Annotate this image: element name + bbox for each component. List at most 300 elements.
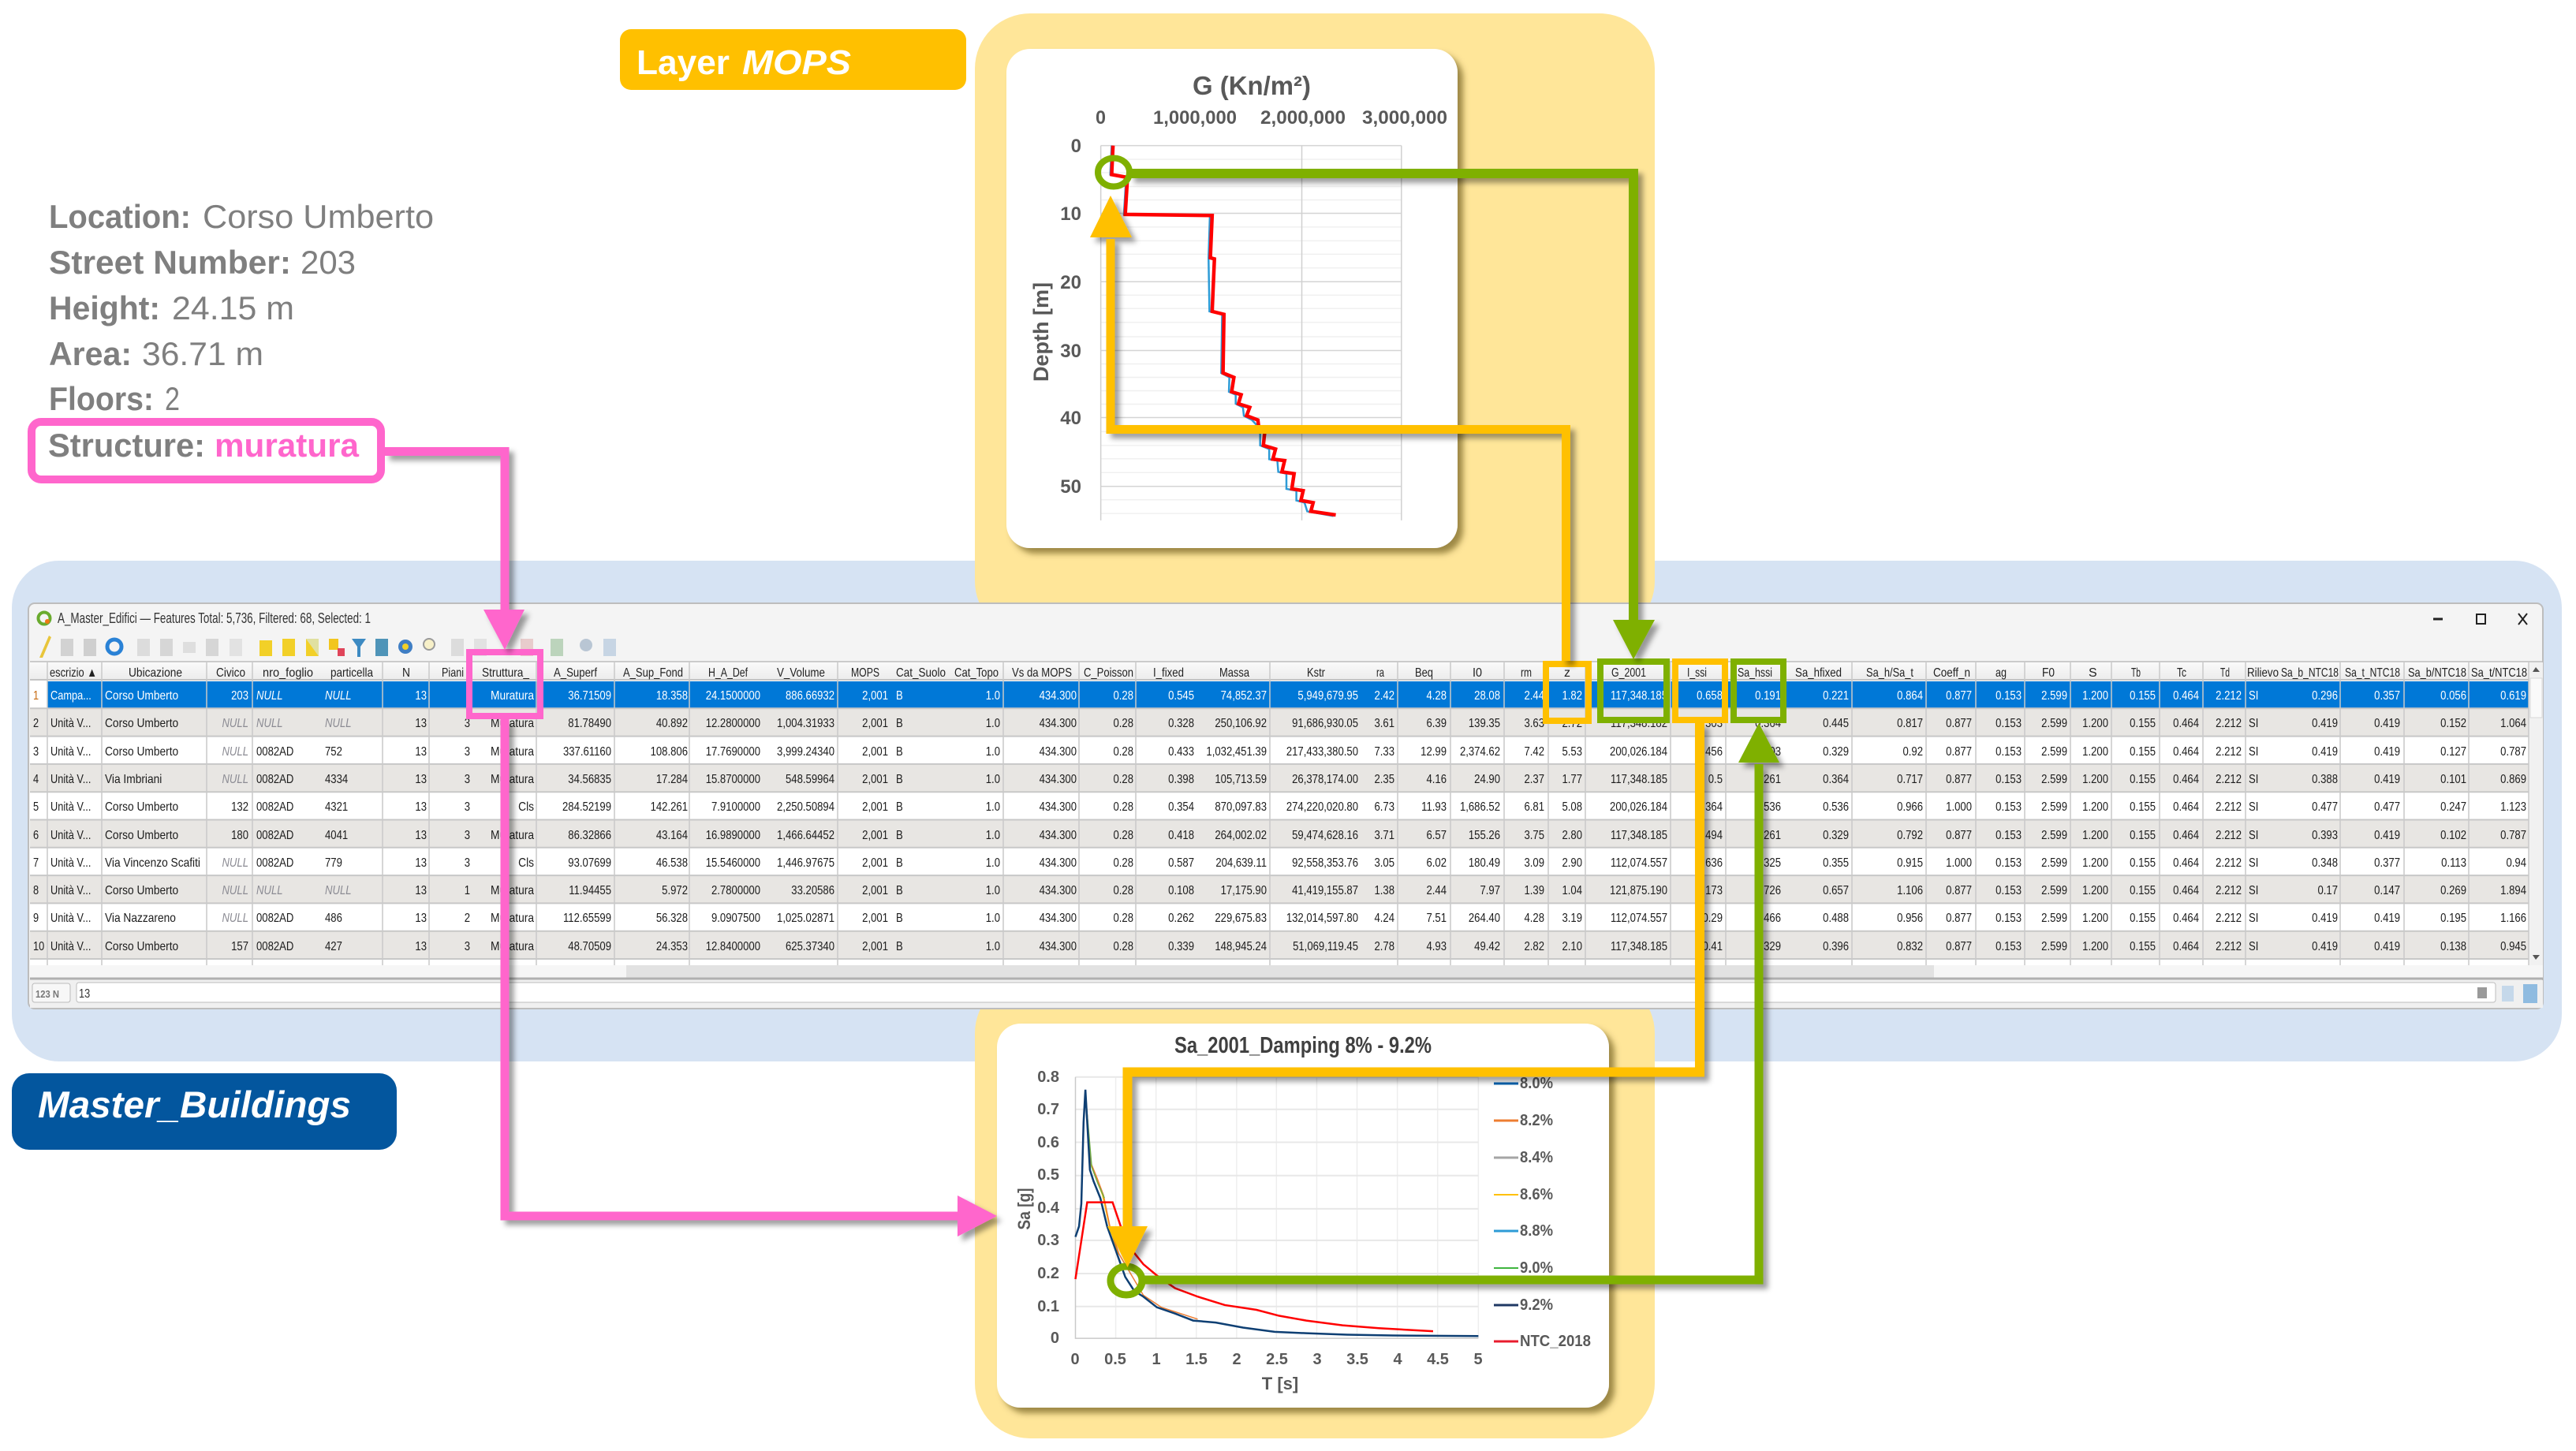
column: H_A_Def: 16.9890000	[706, 829, 760, 842]
column: z: 1.77	[1562, 773, 1582, 786]
column: descrizione: Unità V...	[50, 717, 91, 730]
column: G_2001: 117,348.185	[1611, 829, 1667, 842]
column: row numbers: 9	[33, 912, 39, 925]
table header: Piani	[442, 666, 464, 680]
column: rm: 1.39	[1524, 884, 1544, 897]
column: Sa_hssi: 0.191	[1755, 689, 1781, 703]
panel: Layer MOPS top background	[975, 13, 1655, 636]
column: S: 1.200	[2082, 745, 2108, 759]
column: I0: 28.08	[1474, 689, 1500, 703]
column: Civico: NULL	[222, 856, 248, 870]
column: Tb: 0.155	[2130, 856, 2156, 870]
table header: ag	[1995, 666, 2007, 680]
table header: G_2001	[1611, 666, 1646, 680]
y axis labels: 50	[1060, 476, 1081, 498]
table header: Sa_t_NTC18	[2345, 666, 2400, 680]
column: Ubicazione: Corso Umberto	[105, 744, 178, 759]
column: Struttura: Muratura	[491, 772, 535, 786]
column: Sa_h/Sa_t: 0.956	[1897, 912, 1923, 925]
column: Sa_hfixed: 0.221	[1823, 689, 1849, 703]
column: I_fixed: 0.354	[1168, 800, 1194, 814]
column: A_Superf: 11.94455	[569, 884, 611, 897]
column: Sa_t/NTC18: 0.619	[2500, 689, 2526, 703]
column: G_2001: 117,348.185	[1611, 689, 1667, 703]
table header: H_A_Def	[708, 666, 748, 680]
horizontal scrollbar	[30, 965, 2543, 979]
column: particella: NULL	[325, 884, 352, 897]
column: C_Poisson: 0.28	[1113, 829, 1133, 842]
icon: QGIS logo	[38, 612, 50, 625]
column: Vs da MOPS: 434.300	[1040, 773, 1077, 786]
column: Struttura: Muratura	[491, 744, 535, 759]
column: Sa_t/NTC18: 0.869	[2500, 773, 2526, 786]
column: MOPS: 2,001	[862, 856, 888, 870]
column: G_2001: 112,074.557	[1611, 912, 1667, 925]
column: Struttura: Cls	[518, 856, 534, 870]
column: Sa_b_NTC18: 0.419	[2312, 912, 2338, 925]
column: z: 2.72	[1562, 717, 1582, 730]
column: particella: 486	[325, 912, 342, 925]
column: Kstr: 91,686,930.05	[1292, 717, 1358, 730]
panel: QGIS attribute table window	[28, 603, 2543, 1009]
label: Master_Buildings: Master_Buildings	[38, 1084, 351, 1125]
column: Cat_Suolo: B	[896, 689, 903, 703]
column: Td: 2.212	[2216, 800, 2242, 814]
column: particella: 4321	[325, 800, 348, 814]
column: z: 1.82	[1562, 689, 1582, 703]
column: N: 13	[415, 884, 427, 897]
column: Kstr: 5,949,679.95	[1297, 689, 1358, 703]
x axis labels: 3.5	[1346, 1351, 1368, 1368]
column: H_A_Def	[706, 689, 760, 953]
x axis labels: 3	[1312, 1351, 1322, 1368]
column: I0: 139.35	[1469, 717, 1500, 730]
column: rm: 3.75	[1524, 829, 1544, 842]
column: descrizione: Unità V...	[50, 800, 91, 814]
column: H_A_Def: 12.2800000	[706, 717, 760, 730]
column: nro_foglio: NULL	[256, 689, 283, 703]
table header: Ubicazione	[129, 666, 182, 680]
column: G_2001: 121,875.190	[1610, 884, 1667, 897]
column: ag: 0.153	[1995, 745, 2022, 759]
legend: 8.6%	[1520, 1186, 1553, 1203]
column: A_Superf: 86.32866	[568, 829, 611, 842]
column: Vs da MOPS: 434.300	[1040, 829, 1077, 842]
column: Kstr: 217,433,380.50	[1286, 745, 1358, 759]
column: Sa_hssi: 0.466	[1755, 912, 1781, 925]
column: Sa_t/NTC18: 1.123	[2500, 800, 2526, 814]
column: I_fixed	[1168, 689, 1194, 953]
column: Sa_hfixed: 0.445	[1823, 717, 1849, 730]
column: S: 1.200	[2082, 856, 2108, 870]
table header: Cat_Topo	[954, 666, 999, 680]
column: G_2001: 200,026.184	[1610, 800, 1667, 814]
column: F0: 2.599	[2041, 717, 2067, 730]
column: Sa_h/Sa_t: 0.832	[1897, 940, 1923, 953]
column: A_Sup_Fond	[651, 689, 688, 953]
column: particella: 752	[325, 745, 342, 759]
column: A_Sup_Fond: 40.892	[656, 717, 688, 730]
column: Beq: 7.51	[1426, 912, 1447, 925]
legend: 8.8%	[1520, 1222, 1553, 1240]
text block: building attributes: Floors:	[49, 380, 154, 417]
column: Cat_Topo: 1.0	[986, 717, 1000, 730]
column: Massa: 229,675.83	[1215, 912, 1267, 925]
column: Sa_hfixed: 0.488	[1823, 912, 1849, 925]
column: A_Sup_Fond: 56.328	[656, 912, 688, 925]
column: A_Superf: 48.70509	[568, 940, 611, 953]
column: Td	[2216, 689, 2242, 953]
column: V_Volume: 33.20586	[791, 884, 834, 897]
column: Sa_hssi: 0.261	[1755, 829, 1781, 842]
column: row numbers: 1	[33, 689, 39, 703]
column: Kstr: 59,474,628.16	[1292, 829, 1358, 842]
column: A_Superf: 93.07699	[568, 856, 611, 870]
column: Sa_t_NTC18: 0.419	[2374, 940, 2400, 953]
table header: escrizio ▲	[50, 666, 97, 680]
column: Sa_hssi	[1755, 689, 1781, 953]
column: MOPS: 2,001	[862, 940, 888, 953]
column: S	[2082, 689, 2108, 953]
column: A_Sup_Fond: 43.164	[656, 829, 688, 842]
column: A_Sup_Fond: 108.806	[651, 745, 688, 759]
column: Sa_t_NTC18: 0.477	[2374, 800, 2400, 814]
column: Civico	[222, 689, 248, 953]
column: MOPS: 2,001	[862, 829, 888, 842]
column: particella: NULL	[325, 717, 352, 730]
marker: point on G profile	[1098, 158, 1129, 186]
column: H_A_Def: 7.9100000	[711, 800, 760, 814]
table header: Cat_Suolo	[896, 666, 946, 680]
y axis labels: 0.6	[1037, 1134, 1059, 1151]
column: Sa_t_NTC18: 0.419	[2374, 717, 2400, 730]
column: Tb: 0.155	[2130, 717, 2156, 730]
column: Sa_hssi: 0.261	[1755, 773, 1781, 786]
column: Tb: 0.155	[2130, 800, 2156, 814]
table header: MOPS	[851, 666, 879, 680]
window title: A_Master_Edifici — Features Total: 5,736, Filtered: 68, Selected: 1	[58, 610, 371, 627]
arrow: structure callout to Struttura column	[385, 451, 525, 650]
column: Sa_hfixed	[1823, 689, 1849, 953]
column: F0: 2.599	[2041, 800, 2067, 814]
column: ag: 0.153	[1995, 912, 2022, 925]
column: A_Sup_Fond: 142.261	[651, 800, 688, 814]
column: rm: 4.28	[1524, 912, 1544, 925]
column: Sa_t_NTC18: 0.419	[2374, 829, 2400, 842]
chart title: G (Kn/m²)	[1193, 71, 1311, 100]
column: Sa_b_NTC18: 0.348	[2312, 856, 2338, 870]
column: I_fixed: 0.418	[1168, 829, 1194, 842]
table header: Struttura_	[482, 666, 530, 680]
column: G_2001	[1610, 689, 1667, 953]
table header	[30, 662, 2543, 680]
column: I_fixed: 0.328	[1168, 717, 1194, 730]
column: Sa_t/NTC18: 1.064	[2500, 717, 2526, 730]
column: S: 1.200	[2082, 800, 2108, 814]
column: Sa_h/Sa_t: 1.106	[1897, 884, 1923, 897]
column: ra: 2.35	[1374, 773, 1394, 786]
column: I_ssi: 0.173	[1697, 884, 1723, 897]
column: N: 13	[415, 689, 427, 703]
arrow: spectrum point to Sa_hssi column	[1142, 723, 1779, 1280]
column: Cat_Topo: 1.0	[986, 745, 1000, 759]
column: N: 13	[415, 940, 427, 953]
column: Civico: NULL	[222, 773, 248, 786]
table header: Coeff_n	[1933, 666, 1970, 680]
text block: building attributes: 24.15 m	[172, 289, 294, 326]
chart card: Sa 2001 damping spectra	[997, 1024, 1609, 1408]
column: ra: 1.38	[1374, 884, 1394, 897]
column: Sa_h/Sa_t	[1897, 689, 1923, 953]
table header: Td	[2220, 666, 2230, 680]
column: Sa_b_NTC18: 0.393	[2312, 829, 2338, 842]
column: Vs da MOPS	[1040, 689, 1077, 953]
column: Cat_Suolo: B	[896, 829, 903, 842]
filter bar: 13	[79, 987, 90, 1001]
column: I_ssi: 0.29	[1702, 912, 1723, 925]
axis titles: T [s]	[1262, 1374, 1298, 1393]
column: Tc: 0.464	[2173, 800, 2199, 814]
column: N: 13	[415, 717, 427, 730]
column: rm: 6.81	[1524, 800, 1544, 814]
x axis labels: 1.5	[1185, 1351, 1208, 1368]
column: Cat_Suolo: B	[896, 912, 903, 925]
table header: A_Superf	[554, 666, 597, 680]
column: Cat_Topo	[986, 689, 1000, 953]
column: Cat_Suolo: B	[896, 773, 903, 786]
table header: Beq	[1415, 666, 1433, 680]
column: Coeff_n	[1946, 689, 1972, 953]
column: Tb	[2130, 689, 2156, 953]
column: Cat_Suolo: B	[896, 856, 903, 870]
y axis labels: 30	[1060, 341, 1081, 362]
column: Massa: 204,639.11	[1215, 856, 1267, 870]
text block: building attributes	[49, 198, 434, 417]
column: Piani: 1	[465, 884, 470, 897]
text block: building attributes: Location:	[49, 198, 191, 235]
column: nro_foglio: NULL	[256, 884, 283, 897]
column: Beq: 6.02	[1426, 856, 1447, 870]
column: Sa_b/NTC18: 0.113	[2441, 856, 2466, 870]
column: Sa_t_NTC18: 0.357	[2374, 689, 2400, 703]
table header: Rilievo	[2247, 666, 2279, 680]
column: Td: 2.212	[2216, 773, 2242, 786]
column: Coeff_n: 1.000	[1946, 800, 1972, 814]
column: I_fixed: 0.545	[1168, 689, 1194, 703]
y axis labels: 0.2	[1037, 1265, 1059, 1282]
label: Layer MOPS	[620, 29, 966, 90]
table header: Tb	[2131, 666, 2141, 680]
column: Tb: 0.155	[2130, 940, 2156, 953]
column: MOPS: 2,001	[862, 912, 888, 925]
column: nro_foglio: 0082AD	[256, 829, 293, 842]
column: ra: 3.71	[1374, 829, 1394, 842]
column: Sa_b/NTC18: 0.127	[2440, 745, 2466, 759]
table header: Sa_t/NTC18	[2471, 666, 2527, 680]
column: Rilievo: SI	[2249, 940, 2258, 953]
callout: Structure muratura: muratura	[215, 427, 360, 464]
column: nro_foglio: 0082AD	[256, 773, 293, 786]
column: Cat_Topo: 1.0	[986, 800, 1000, 814]
column: Sa_b_NTC18	[2312, 689, 2338, 953]
column: Coeff_n: 0.877	[1946, 773, 1972, 786]
column: F0: 2.599	[2041, 856, 2067, 870]
column: Rilievo: SI	[2249, 856, 2258, 870]
table header: F0	[2042, 666, 2055, 680]
column: ra: 2.42	[1374, 689, 1394, 703]
column: Cat_Suolo: B	[896, 800, 903, 814]
text block: building attributes: 203	[301, 244, 356, 281]
callout: Structure muratura	[32, 422, 381, 479]
column: I_ssi: 0.494	[1697, 829, 1723, 842]
column: ag: 0.153	[1995, 773, 2022, 786]
text block: building attributes: Street Number:	[49, 244, 291, 281]
column: Vs da MOPS: 434.300	[1040, 940, 1077, 953]
column: I0: 2,374.62	[1460, 745, 1500, 759]
column: Kstr: 92,558,353.76	[1292, 856, 1358, 870]
column: rm	[1524, 689, 1544, 953]
column: z	[1562, 689, 1582, 953]
column: row numbers: 4	[33, 773, 39, 786]
column: S: 1.200	[2082, 884, 2108, 897]
column: A_Superf: 112.65599	[563, 912, 611, 925]
column: z: 2.90	[1562, 856, 1582, 870]
column: Piani: 3	[465, 940, 470, 953]
column: Td: 2.212	[2216, 689, 2242, 703]
x axis labels: 1,000,000	[1153, 107, 1237, 129]
column: Struttura: Muratura	[491, 716, 535, 730]
table header: I_ssi	[1687, 666, 1707, 680]
column: Sa_hssi: 0.536	[1755, 800, 1781, 814]
x axis labels: 3,000,000	[1362, 107, 1447, 129]
vertical scrollbar	[2529, 662, 2543, 965]
column: I0: 49.42	[1474, 940, 1500, 953]
column: Beq: 4.16	[1426, 773, 1447, 786]
y axis labels: 0.4	[1037, 1199, 1060, 1217]
column: Sa_t/NTC18	[2500, 689, 2526, 953]
column: Coeff_n: 0.877	[1946, 745, 1972, 759]
table header: Civico	[216, 666, 245, 680]
column: Ubicazione	[105, 688, 200, 953]
column: Sa_t/NTC18: 0.94	[2506, 856, 2526, 870]
table header: z	[1564, 666, 1570, 680]
callout: Structure muratura: Structure:	[48, 427, 205, 464]
column: row numbers	[33, 689, 44, 953]
column: Beq: 6.39	[1426, 717, 1447, 730]
label: Layer MOPS: Layer	[637, 43, 730, 82]
column: F0: 2.599	[2041, 940, 2067, 953]
column: Rilievo: SI	[2249, 717, 2258, 730]
column: Sa_t/NTC18: 0.787	[2500, 829, 2526, 842]
column: N: 13	[415, 912, 427, 925]
column: F0	[2041, 689, 2067, 953]
text block: building attributes: Corso Umberto	[203, 198, 434, 235]
column: Sa_hfixed: 0.355	[1823, 856, 1849, 870]
column: rm: 3.63	[1524, 717, 1544, 730]
column: Sa_t/NTC18: 1.894	[2500, 884, 2526, 897]
column: Massa: 105,713.59	[1215, 773, 1267, 786]
filter bar	[30, 980, 2543, 1008]
column: A_Superf: 34.56835	[568, 773, 611, 786]
table header: A_Sup_Fond	[623, 666, 683, 680]
column: particella: 779	[325, 856, 342, 870]
column: Cat_Suolo	[896, 689, 903, 953]
column: I_ssi: 0.41	[1702, 940, 1723, 953]
arrow: z column to depth axis	[1090, 196, 1566, 661]
column: Rilievo: SI	[2249, 912, 2258, 925]
column: Civico: NULL	[222, 884, 248, 897]
column: Rilievo	[2249, 689, 2258, 953]
column: Rilievo: SI	[2249, 773, 2258, 786]
column: Struttura: Muratura	[491, 911, 535, 925]
table header: Sa_hfixed	[1795, 666, 1842, 680]
column: C_Poisson: 0.28	[1113, 856, 1133, 870]
column: Coeff_n: 0.877	[1946, 940, 1972, 953]
column: Ubicazione: Via Imbriani	[105, 772, 162, 786]
column: C_Poisson: 0.28	[1113, 717, 1133, 730]
column: F0: 2.599	[2041, 884, 2067, 897]
column: Massa: 250,106.92	[1215, 717, 1267, 730]
legend	[1494, 1075, 1591, 1350]
table header: Tc	[2177, 666, 2186, 680]
column: Struttura: Cls	[518, 800, 534, 814]
table header: rm	[1521, 666, 1532, 680]
column: Coeff_n: 0.877	[1946, 829, 1972, 842]
column: N: 13	[415, 773, 427, 786]
column: Sa_t/NTC18: 0.787	[2500, 745, 2526, 759]
column: C_Poisson	[1113, 689, 1133, 953]
column: Rilievo: SI	[2249, 689, 2258, 703]
highlight box: Sa_hssi column	[1734, 662, 1783, 720]
x axis labels: 1	[1152, 1351, 1161, 1368]
highlight box: Struttura column	[469, 652, 540, 716]
column: C_Poisson: 0.28	[1113, 912, 1133, 925]
column: descrizione: Unità V...	[50, 829, 91, 842]
column: row numbers: 7	[33, 856, 39, 870]
column: I_ssi	[1697, 689, 1723, 953]
column: Kstr: 274,220,020.80	[1286, 800, 1358, 814]
column: Sa_h/Sa_t: 0.817	[1897, 717, 1923, 730]
text block: building attributes: Height:	[49, 289, 160, 326]
column: Cat_Suolo: B	[896, 884, 903, 897]
column: I0: 1,686.52	[1460, 800, 1500, 814]
column: row numbers: 8	[33, 884, 39, 897]
column: Piani: 3	[465, 829, 470, 842]
table header: ra	[1376, 666, 1384, 680]
text block: building attributes: 36.71 m	[142, 335, 263, 372]
column: Sa_h/Sa_t: 0.92	[1902, 745, 1923, 759]
column: ag: 0.153	[1995, 829, 2022, 842]
table header: Sa_b/NTC18	[2408, 666, 2466, 680]
column: Kstr	[1286, 689, 1358, 953]
column: Sa_hssi: 0.329	[1755, 940, 1781, 953]
column: C_Poisson: 0.28	[1113, 745, 1133, 759]
column: H_A_Def: 9.0907500	[711, 912, 760, 925]
column: Sa_hfixed: 0.329	[1823, 829, 1849, 842]
y axis labels: 0.5	[1037, 1166, 1059, 1184]
column: z: 2.10	[1562, 940, 1582, 953]
column: Beq: 4.28	[1426, 689, 1447, 703]
column: Piani: 3	[465, 800, 470, 814]
x axis labels: 2,000,000	[1260, 107, 1346, 129]
column: Struttura: Muratura	[491, 828, 535, 842]
column: A_Superf: 337.61160	[563, 745, 611, 759]
table header: V_Volume	[777, 666, 825, 680]
column: N: 13	[415, 856, 427, 870]
column: A_Superf: 36.71509	[568, 689, 611, 703]
table header: S	[2089, 666, 2097, 680]
column: ra	[1374, 689, 1394, 953]
